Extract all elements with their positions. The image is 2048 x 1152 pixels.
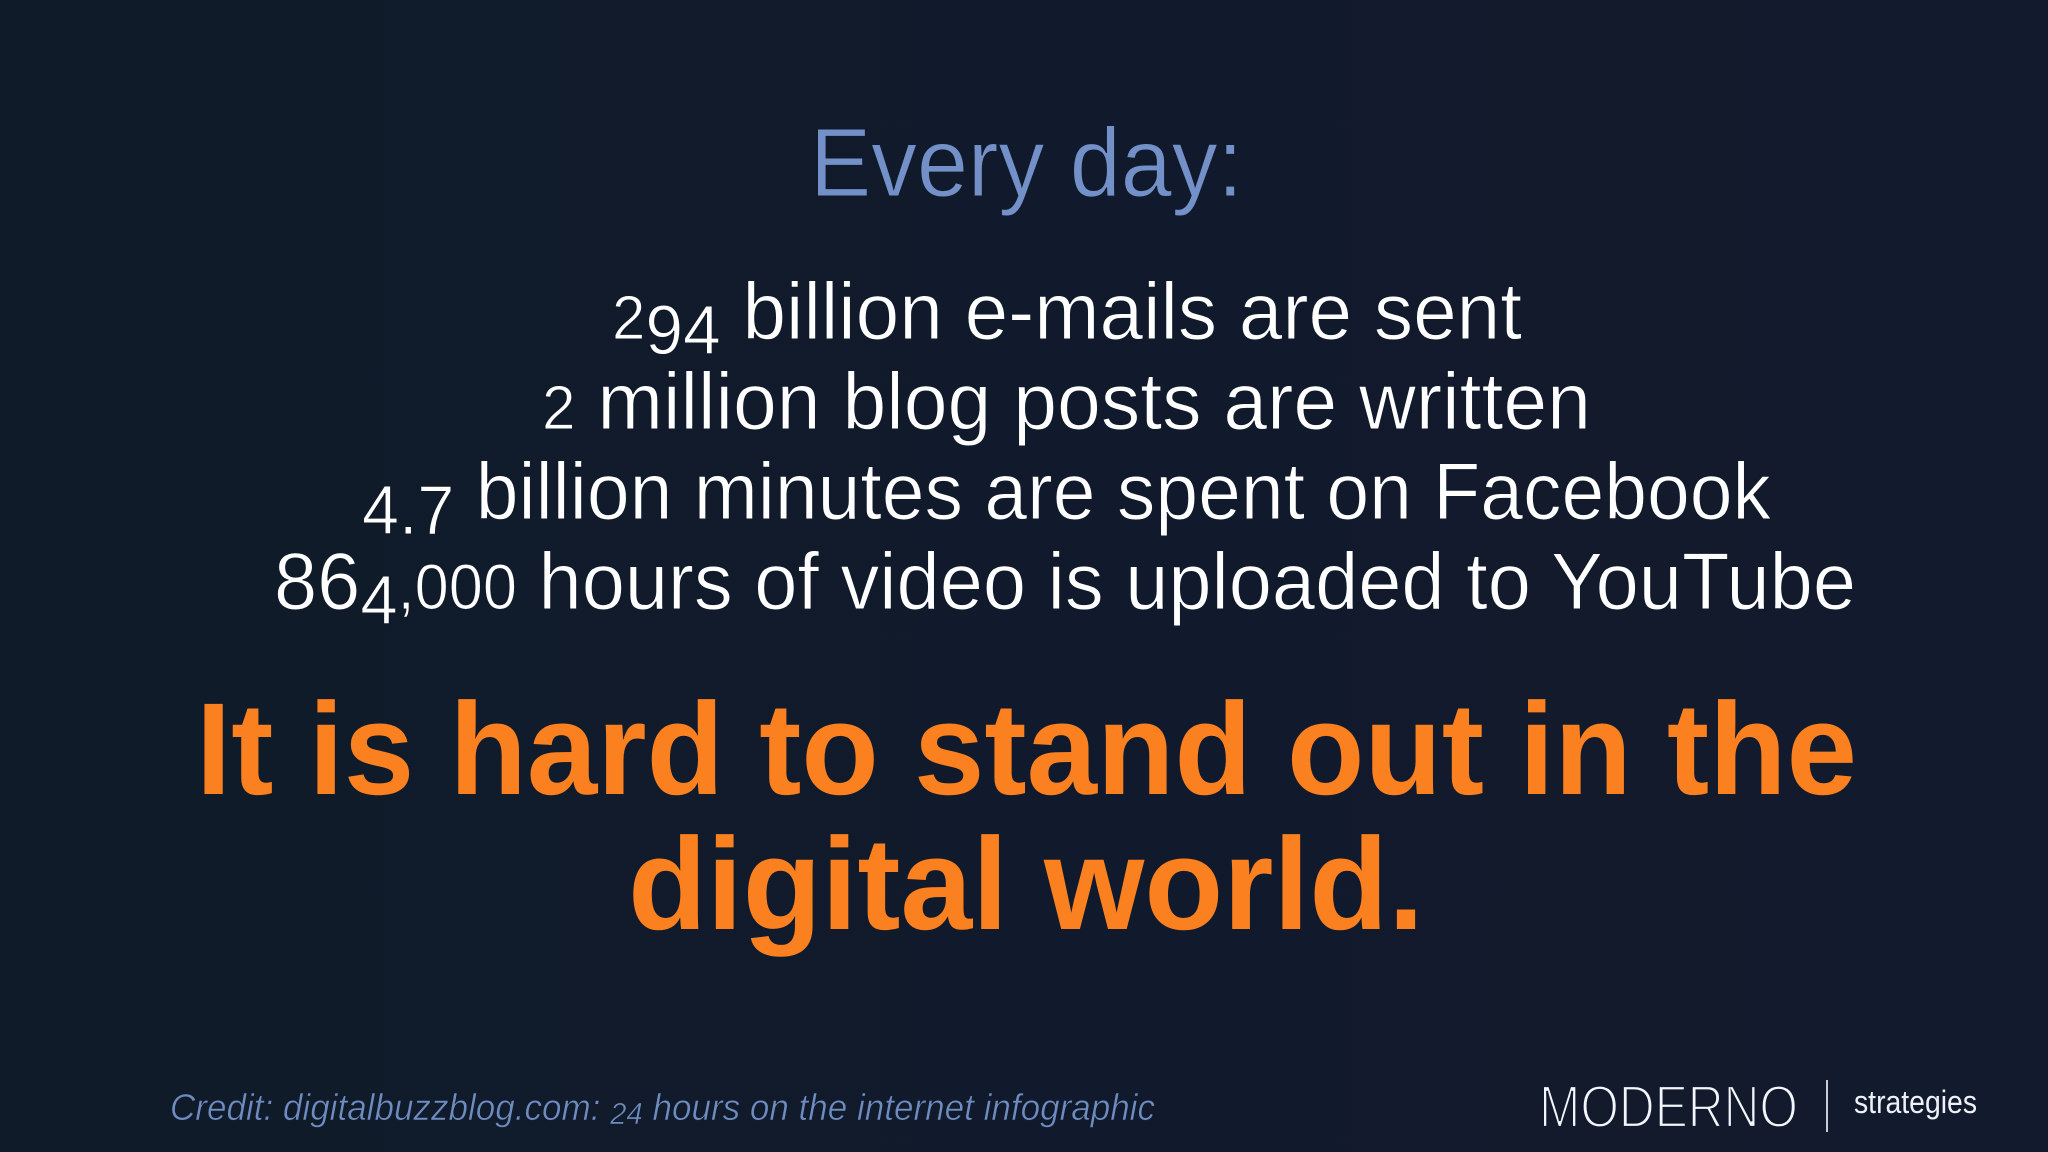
stat: e-mails: 94: [645, 291, 721, 369]
stat: YouTube: hours of video is uploaded to YouTube: [539, 537, 1915, 627]
credit: 24: [609, 1096, 643, 1131]
stat: YouTube: 4: [360, 561, 398, 639]
stat: YouTube: ,000: [398, 551, 517, 623]
stat: blog posts: 2 million blog posts are written: [542, 357, 1591, 447]
logo divider: [1826, 1080, 1828, 1132]
stat: e-mails: billion e-mails are sent: [721, 267, 1522, 357]
logo tagline: strategies: [1854, 1084, 1977, 1120]
credit: Credit: digitalbuzzblog.com:: [170, 1087, 624, 1128]
stat: e-mails: 2: [612, 284, 645, 353]
logo: Moderno strategies: [1539, 1074, 1977, 1140]
heading: Every day: Every day:: [810, 108, 1243, 217]
stat: Facebook: 4.7: [362, 471, 454, 549]
stat: Facebook: billion minutes are spent on Facebook: [454, 447, 1771, 537]
stat: YouTube: 86: [274, 537, 364, 627]
statistics list: [274, 267, 1856, 639]
credit: hours on the internet infographic: [643, 1087, 1155, 1128]
headline line 2: digital world.: [628, 810, 1424, 957]
headline line 1: It is hard to stand out in the: [196, 675, 1857, 822]
headline: [196, 675, 1857, 957]
logo wordmark: MODERNO: [1539, 1074, 1798, 1140]
